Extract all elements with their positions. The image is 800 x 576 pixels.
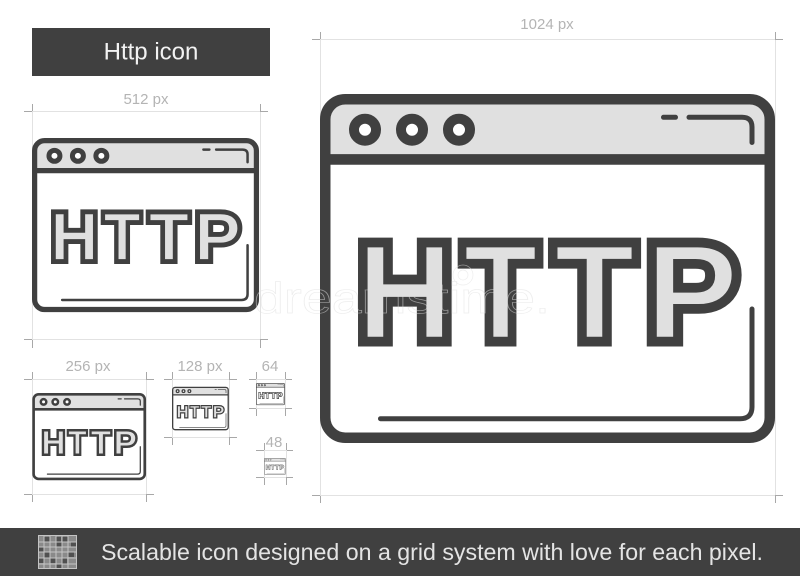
icon: 128 px browser window xyxy=(173,387,228,430)
icon: 64 px browser window: T xyxy=(265,391,270,401)
guides: 128 px xyxy=(164,372,237,445)
icon: 512 px browser window: T xyxy=(149,200,189,275)
icon: 512 px browser window: P xyxy=(195,200,241,275)
icon: 48 px browser window: P xyxy=(280,465,285,472)
icon: 48 px browser window: T xyxy=(275,465,279,472)
title bar: Http icon xyxy=(104,38,198,66)
icon: 48 px browser window: H xyxy=(266,465,271,472)
icon: 128 px browser window: P xyxy=(213,402,224,421)
label: 128 px: 128 px xyxy=(177,358,223,375)
guides: 256 px xyxy=(24,372,154,502)
label: 64: 64 xyxy=(262,358,278,375)
watermark: dreamstime. xyxy=(254,274,550,323)
icon: 512 px browser window: H xyxy=(50,200,98,275)
icon: 48 px browser window: P xyxy=(280,465,285,472)
icon: 256 px browser window: T xyxy=(91,425,111,462)
icon: 1024 px browser window: T xyxy=(554,217,635,368)
icon: 1024 px browser window: H xyxy=(357,217,453,368)
icon: 48 px browser window xyxy=(264,458,286,475)
icon: 512 px browser window xyxy=(34,140,257,310)
icon: 48 px browser window: T xyxy=(271,464,275,472)
icon: 64 px browser window: P xyxy=(277,391,283,400)
icon: 512 px browser window: T xyxy=(104,199,141,275)
icon: 512 px browser window: T xyxy=(149,200,189,275)
icon: 128 px browser window: H xyxy=(177,402,189,421)
guides: 512 px xyxy=(24,104,268,348)
guides: 1024 px xyxy=(312,32,783,503)
icon: 256 px browser window: H xyxy=(42,425,65,462)
icon: 1024 px browser window xyxy=(325,99,770,438)
icon: 48 px browser window: T xyxy=(271,464,275,472)
icon: 1024 px browser window: P xyxy=(646,216,738,367)
icon: 256 px browser window: P xyxy=(114,425,137,462)
guides: 64 px xyxy=(249,372,292,416)
icon: 256 px browser window: T xyxy=(68,424,87,461)
label: 512 px: 512 px xyxy=(123,91,169,108)
icon: 512 px browser window: H xyxy=(50,200,98,275)
icon: 128 px browser window: P xyxy=(213,402,224,421)
icon: 256 px browser window: T xyxy=(91,425,111,462)
label: 256 px: 256 px xyxy=(65,358,111,375)
icon: 256 px browser window: T xyxy=(68,424,87,461)
footer band xyxy=(0,528,800,576)
label: 1024 px: 1024 px xyxy=(520,16,574,33)
icon: 128 px browser window: T xyxy=(190,403,199,421)
icon: 128 px browser window: T xyxy=(190,403,199,421)
icon: 64 px browser window: P xyxy=(277,391,283,400)
icon: 64 px browser window: H xyxy=(258,390,264,401)
icon: 512 px browser window: P xyxy=(195,200,241,275)
icon: 1024 px browser window: H xyxy=(357,217,453,368)
icon: 1024 px browser window: P xyxy=(646,216,738,367)
icon: 64 px browser window: T xyxy=(271,390,277,401)
watermark xyxy=(254,265,550,323)
icon: 128 px browser window: T xyxy=(201,402,211,421)
icon: 64 px browser window: T xyxy=(265,391,270,401)
icon: 64 px browser window: T xyxy=(271,390,277,401)
icon: 128 px browser window: H xyxy=(177,402,189,421)
footer text: Scalable icon designed on a grid system with love for each pixel. xyxy=(101,539,763,565)
title bar xyxy=(32,28,270,76)
icon: 1024 px browser window: T xyxy=(464,217,538,368)
icon: 64 px browser window xyxy=(256,383,285,405)
icon: 48 px browser window: H xyxy=(266,465,271,472)
icon: 256 px browser window: H xyxy=(42,425,65,462)
label: 48: 48 xyxy=(266,434,282,451)
icon: 128 px browser window: T xyxy=(201,402,211,421)
icon: 512 px browser window: T xyxy=(104,199,141,275)
icon: 64 px browser window: H xyxy=(258,390,264,401)
guides: 48 px xyxy=(256,443,293,485)
icon: 256 px browser window: P xyxy=(114,425,137,462)
icon: 256 px browser window xyxy=(34,394,145,479)
icon: 1024 px browser window: T xyxy=(464,217,538,368)
icon: 1024 px browser window: T xyxy=(554,217,635,368)
icon: 48 px browser window: T xyxy=(275,465,279,472)
icon: pixel grid xyxy=(38,535,77,569)
